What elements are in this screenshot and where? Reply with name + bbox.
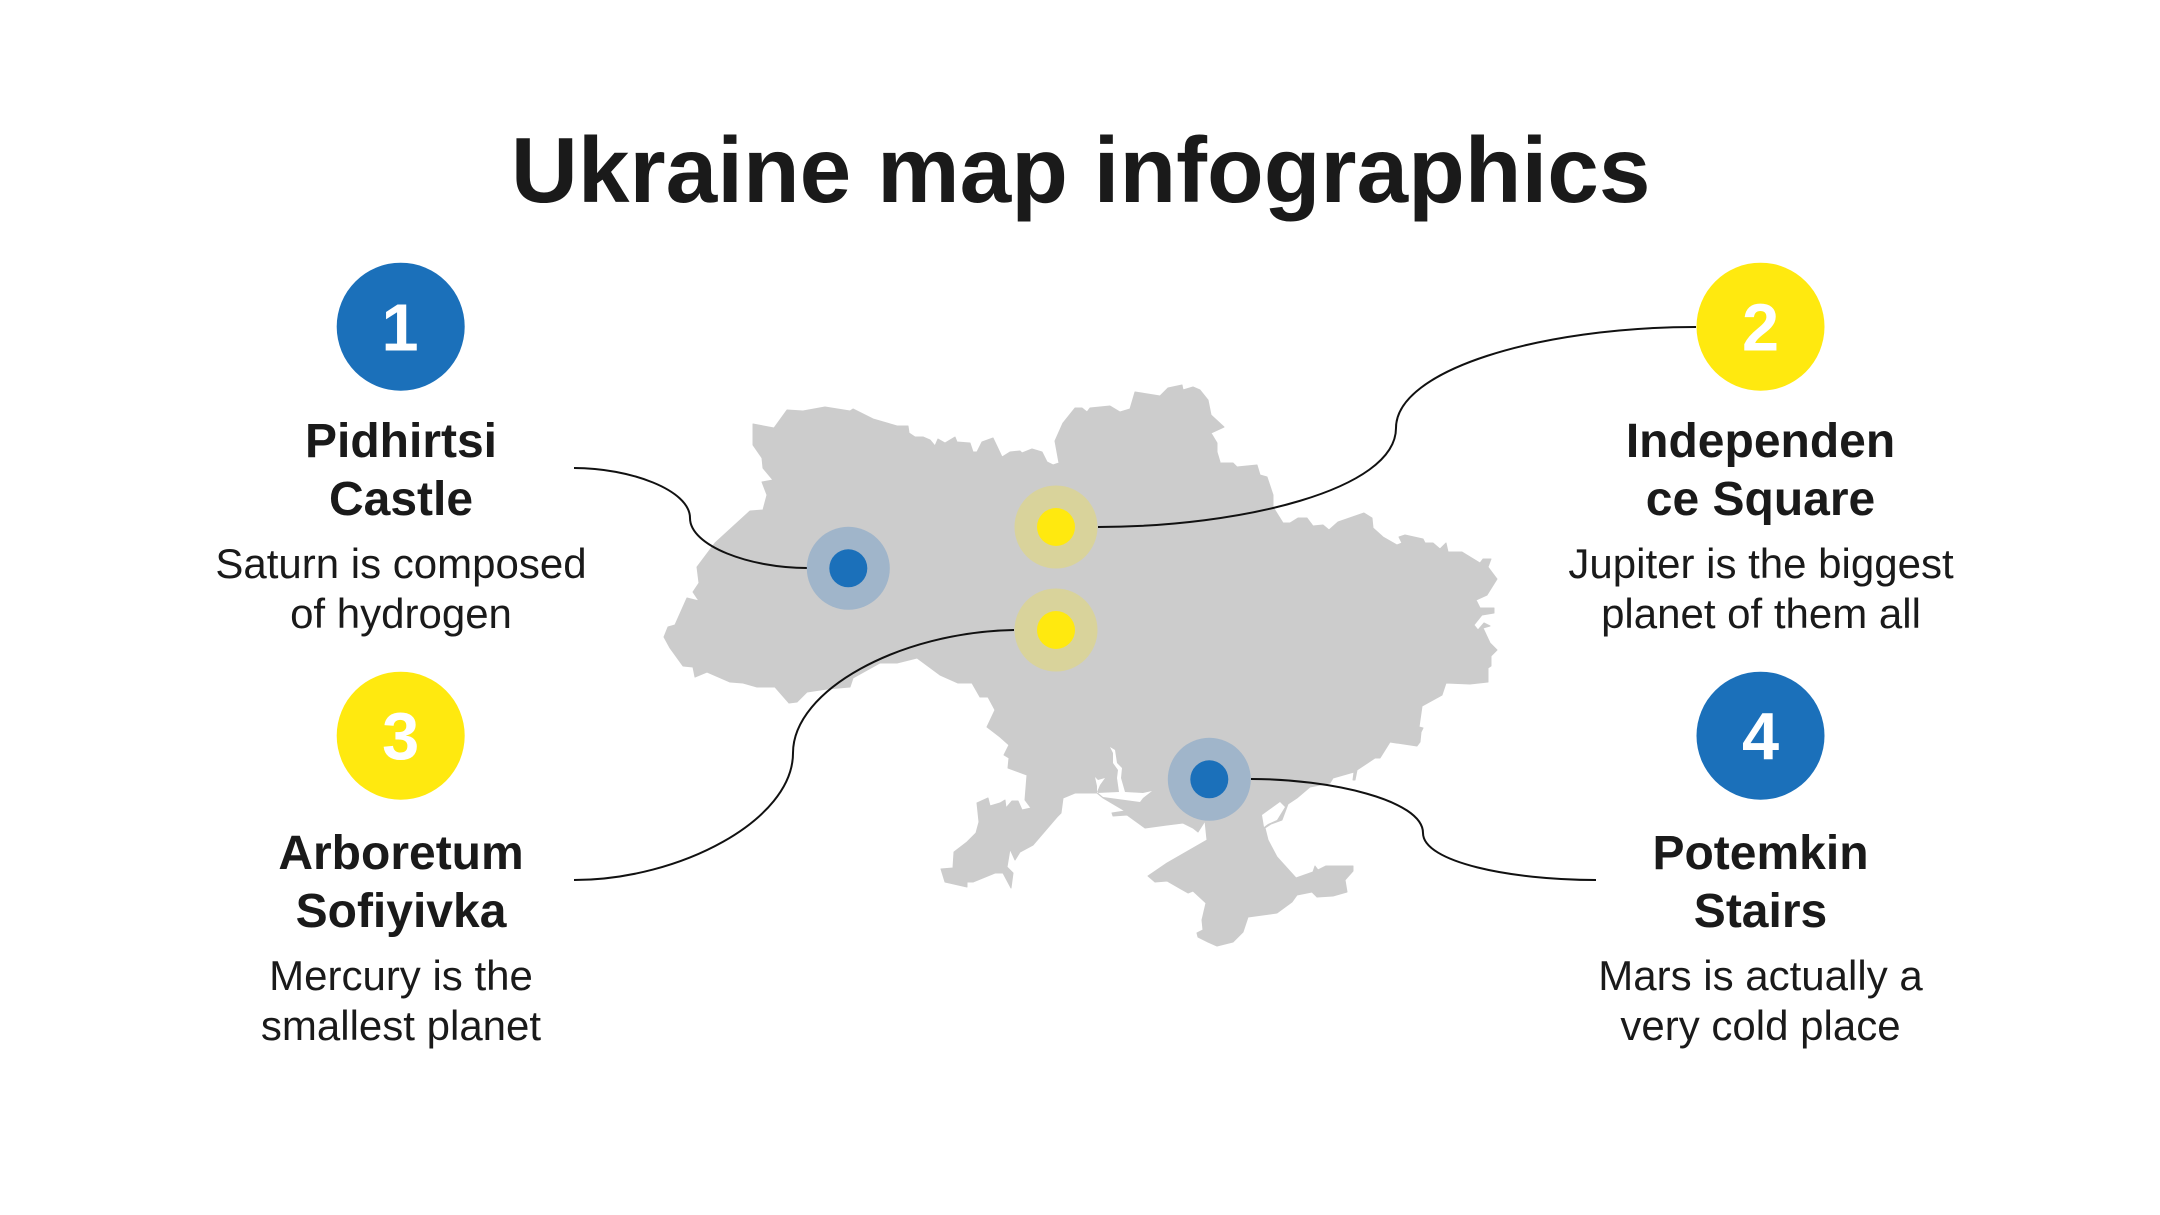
description 4: Mars is actually a [1598,952,1923,999]
description 1: Saturn is composed [215,540,587,587]
number badge 4: 4 [1742,700,1779,774]
heading 2: ce Square [1646,473,1875,526]
description 3: Mercury is the [269,952,533,999]
description 1: of hydrogen [290,590,512,637]
number badge 2: 2 [1742,292,1779,366]
map pin 4 [1168,738,1251,821]
description 2: Jupiter is the biggest [1568,540,1954,587]
connector line 1 [574,468,807,568]
heading 4: Stairs [1694,885,1827,938]
heading 1: Castle [329,473,473,526]
panel: Pidhirtsi Castle [215,263,587,637]
heading 1: Pidhirtsi [305,415,497,468]
connector line 2 [1098,327,1696,527]
heading 2: Independen [1626,415,1895,468]
map pin 2 [1014,486,1098,568]
number badge 3: 3 [382,700,419,774]
map of Ukraine [664,385,1497,946]
description 3: smallest planet [261,1002,541,1049]
number badge 3 [337,672,465,800]
heading 3: Arboretum [278,827,524,880]
panel: Independence Square [1568,263,1954,637]
connector line 4 [1251,779,1596,880]
number badge 1: 1 [381,292,419,366]
title: Ukraine map infographics [511,118,1651,222]
panel: Potemkin Stairs [1598,672,1923,1049]
number badge 2 [1696,263,1824,391]
description 4: very cold place [1620,1002,1901,1049]
description 2: planet of them all [1601,590,1921,637]
connector line 3 [574,630,1014,880]
map pin 1 [807,527,890,610]
map pin 3 [1014,588,1098,672]
heading 4: Potemkin [1652,827,1869,880]
panel: Arboretum Sofiyivka [261,672,541,1049]
number badge 1 [337,263,465,391]
number badge 4 [1696,672,1824,800]
heading 3: Sofiyivka [296,885,507,938]
